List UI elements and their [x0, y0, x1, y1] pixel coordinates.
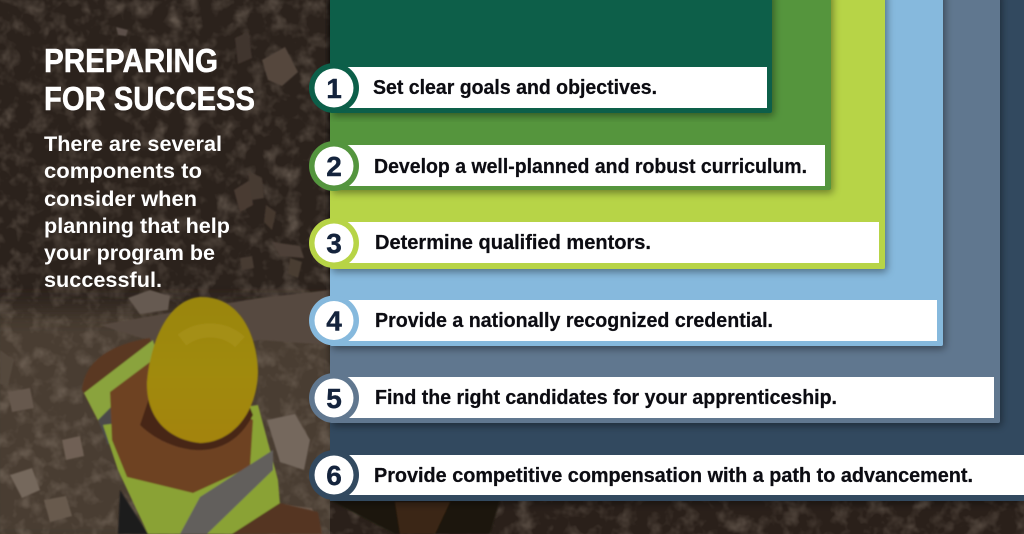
- panel 6: navy: [330, 0, 1024, 501]
- step 6: 6: [326, 460, 342, 491]
- step 5: [309, 373, 994, 423]
- step 6: [309, 450, 1024, 500]
- step 5: Find the right candidates for your apprenticeship.: [375, 386, 837, 409]
- panel 5: slate: [330, 0, 1000, 423]
- step 4: 4: [326, 306, 342, 336]
- heading: FOR SUCCESS: [44, 80, 255, 117]
- panel 2: green: [330, 0, 831, 190]
- step 2: [309, 141, 825, 191]
- panel 4: light blue: [330, 0, 943, 346]
- step 1: 1: [326, 73, 342, 104]
- heading: [44, 42, 255, 117]
- description: There are several: [44, 132, 222, 156]
- step 1: Set clear goals and objectives.: [373, 76, 657, 99]
- description: planning that help: [44, 214, 230, 238]
- step 4: Provide a nationally recognized credential.: [375, 309, 773, 332]
- step 4: [309, 296, 937, 346]
- step 3: 3: [326, 228, 342, 259]
- panel 3: lime: [330, 0, 885, 269]
- step 2: Develop a well-planned and robust curriculum.: [374, 155, 807, 178]
- step 3: [309, 218, 879, 268]
- hard hat: [147, 297, 258, 443]
- description: successful.: [44, 268, 162, 292]
- nested panels: [330, 0, 1024, 501]
- step 2: 2: [326, 151, 342, 182]
- description: [44, 132, 230, 292]
- panel 1: dark green: [330, 0, 772, 113]
- step 5: 5: [326, 383, 342, 414]
- description: your program be: [44, 241, 215, 265]
- worker in hard hat and safety vest: [82, 297, 500, 534]
- step 3: Determine qualified mentors.: [375, 231, 651, 254]
- description: components to: [44, 159, 202, 183]
- step 6: Provide competitive compensation with a path to advancement.: [374, 464, 973, 487]
- description: consider when: [44, 187, 197, 211]
- step 1: [309, 63, 767, 113]
- left text block: [44, 42, 255, 292]
- heading: PREPARING: [44, 42, 218, 79]
